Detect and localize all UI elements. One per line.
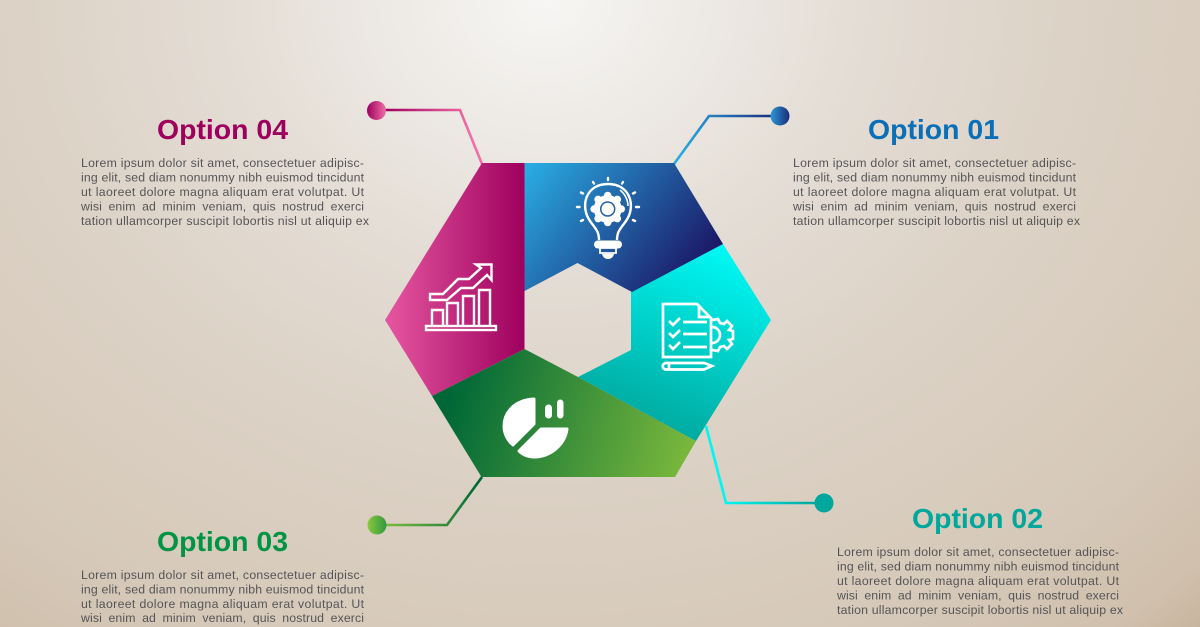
text block: option 04: ut laoreet dolore magna aliquam erat volutpat. Ut [81, 185, 365, 199]
segment: option 04 magenta [385, 163, 524, 396]
text block: option 02: Lorem ipsum dolor sit amet, consectetuer adipisc- [837, 545, 1119, 559]
heading: option 01: Option 01 [868, 114, 999, 145]
connector: option 03 [368, 477, 482, 534]
text block: option 02: tation ullamcorper suscipit lobortis nisl ut aliquip ex [837, 603, 1124, 617]
text block: option 02 [836, 545, 1124, 617]
text block: option 04: ing elit, sed diam nonummy nibh euismod tincidunt [81, 170, 365, 184]
icon: pie chart [504, 399, 567, 457]
text block: option 01: wisi enim ad minim veniam, quis nostrud exerci [792, 200, 1076, 214]
text block: option 03: ing elit, sed diam nonummy nibh euismod tincidunt [81, 582, 365, 596]
text block: option 01: ing elit, sed diam nonummy nibh euismod tincidunt [793, 170, 1077, 184]
text block: option 01: Lorem ipsum dolor sit amet, consectetuer adipisc- [793, 156, 1076, 170]
text block: option 03 [80, 568, 365, 625]
text block: option 03: Lorem ipsum dolor sit amet, consectetuer adipisc- [81, 568, 364, 582]
text block: option 02: ut laoreet dolore magna aliquam erat volutpat. Ut [837, 574, 1120, 588]
icon: growth bar chart [426, 264, 496, 330]
text block: option 01 [792, 156, 1081, 228]
hexagon diagram [385, 163, 771, 477]
text block: option 02: ing elit, sed diam nonummy nibh euismod tincidunt [837, 560, 1120, 574]
text block: option 04: tation ullamcorper suscipit lobortis nisl ut aliquip ex [81, 214, 370, 228]
text block: option 04 [80, 156, 370, 228]
connector: option 02 [706, 426, 834, 512]
text block: option 01: ut laoreet dolore magna aliquam erat volutpat. Ut [793, 185, 1077, 199]
segment: option 01 blue [524, 163, 723, 292]
text block: option 03: wisi enim ad minim veniam, quis nostrud exerci [80, 611, 364, 625]
connector: option 01 [674, 106, 790, 164]
text block: option 03: ut laoreet dolore magna aliquam erat volutpat. Ut [81, 597, 365, 611]
segment: option 02 cyan [578, 244, 771, 441]
text block: option 02: wisi enim ad minim veniam, quis nostrud exerci [836, 588, 1119, 602]
text block: option 04: Lorem ipsum dolor sit amet, consectetuer adipisc- [81, 156, 364, 170]
connector: option 04 [367, 101, 482, 164]
heading: option 03: Option 03 [157, 526, 288, 557]
heading: option 02: Option 02 [912, 503, 1043, 534]
segment: option 03 green [432, 349, 696, 477]
text block: option 04: wisi enim ad minim veniam, quis nostrud exerci [80, 200, 364, 214]
text block: option 01: tation ullamcorper suscipit lobortis nisl ut aliquip ex [793, 214, 1081, 228]
heading: option 04: Option 04 [157, 114, 288, 145]
icon: light bulb with gear [577, 178, 639, 259]
icon: document with gear [663, 304, 733, 370]
